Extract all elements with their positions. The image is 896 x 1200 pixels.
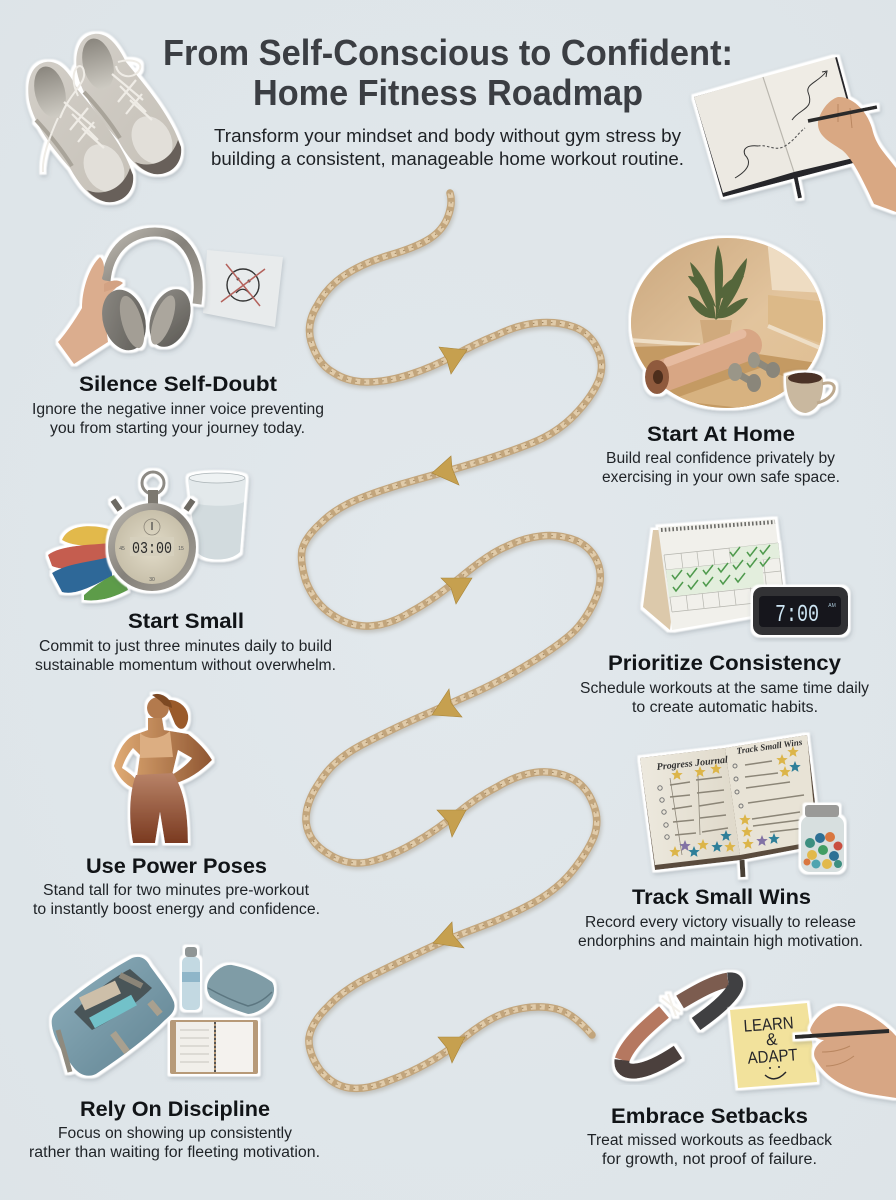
text block: Commit to just three minutes daily to build [39, 638, 332, 655]
icon: resistance bands [48, 526, 128, 600]
text block: to instantly boost energy and confidence. [33, 901, 320, 918]
heading: Embrace Setbacks [611, 1104, 808, 1128]
heading: Track Small Wins [632, 885, 811, 909]
heading: Rely On Discipline [80, 1097, 270, 1121]
icon: progress journal: Track Small Wins [736, 737, 803, 756]
title: Home Fitness Roadmap [253, 72, 643, 113]
text block: you from starting your journey today. [50, 420, 305, 437]
text block [602, 450, 840, 486]
text block: for growth, not proof of failure. [602, 1151, 817, 1168]
icon: stopwatch: 15 [178, 546, 184, 552]
text block: endorphins and maintain high motivation. [578, 933, 863, 950]
title: From Self-Conscious to Confident: [163, 32, 733, 73]
icon: jar of marbles [801, 805, 844, 872]
panel: Track Small Wins [578, 735, 863, 950]
icon: crossed-out frowning face note [203, 250, 284, 329]
icon: alarm clock: AM [828, 603, 836, 609]
icon: alarm clock [753, 587, 848, 635]
arrow 1 [439, 347, 467, 374]
icon: broken strap [622, 980, 736, 1071]
arrow 5 [437, 810, 466, 837]
text block [35, 638, 336, 674]
icon: sneakers [28, 34, 181, 202]
text block: Treat missed workouts as feedback [587, 1132, 832, 1149]
panel: Start Small [35, 472, 336, 674]
icon: home room scene [625, 235, 830, 420]
icon: gym bag [52, 957, 175, 1076]
icon: woman in power pose [114, 694, 212, 843]
arrow 7 [438, 1037, 465, 1063]
text block: rather than waiting for fleeting motivation. [29, 1144, 320, 1161]
icon: alarm clock: 7:00 [775, 602, 819, 629]
panel: Rely On Discipline [29, 947, 320, 1161]
icon: headphones and hand [58, 232, 198, 364]
icon: coffee cup [786, 372, 834, 413]
icon: stopwatch: 45 [119, 546, 125, 552]
icon: hand writing with pen [795, 1006, 896, 1098]
icon: open planner [170, 1020, 258, 1074]
text block [32, 401, 324, 437]
text block: Record every victory visually to release [585, 914, 856, 931]
subtitle: building a consistent, manageable home workout routine. [211, 148, 684, 169]
heading: Start Small [128, 609, 244, 633]
text block: Stand tall for two minutes pre-workout [43, 882, 310, 899]
text block [33, 882, 320, 918]
heading: Start At Home [647, 422, 795, 446]
panel: Prioritize Consistency [580, 519, 869, 716]
icon: water bottle [182, 947, 200, 1010]
icon: desk calendar [643, 519, 786, 630]
icon: progress journal [640, 735, 820, 877]
title [163, 32, 733, 113]
text block: to create automatic habits. [632, 699, 818, 716]
subtitle [211, 125, 684, 169]
icon: folded towel [207, 965, 274, 1014]
text block: sustainable momentum without overwhelm. [35, 657, 336, 674]
text block [580, 680, 869, 716]
text block [587, 1132, 832, 1168]
rope [302, 193, 603, 1091]
panel: Start At Home [602, 235, 840, 486]
heading: Silence Self-Doubt [79, 372, 277, 396]
arrow 2 [432, 456, 459, 485]
text block: Ignore the negative inner voice preventing [32, 401, 324, 418]
icon: water glass [188, 473, 246, 560]
text block: exercising in your own safe space. [602, 469, 840, 486]
heading: Prioritize Consistency [608, 651, 841, 675]
icon: sticky note Learn and Adapt: ADAPT [747, 1045, 798, 1068]
text block: Build real confidence privately by [606, 450, 835, 467]
text block: Schedule workouts at the same time daily [580, 680, 869, 697]
panel: Embrace Setbacks [587, 980, 896, 1168]
text block [578, 914, 863, 950]
subtitle: Transform your mindset and body without gym stress by [214, 125, 682, 146]
arrow 6 [433, 922, 464, 948]
arrow 3 [441, 578, 472, 604]
roadmap rope with arrows [302, 193, 603, 1091]
heading: Use Power Poses [86, 854, 267, 878]
icon: stopwatch: 03:00 [132, 540, 172, 559]
text block: Focus on showing up consistently [58, 1125, 292, 1142]
icon: stopwatch: 30 [149, 577, 155, 583]
icon: progress journal: Progress Journal [656, 755, 729, 773]
icon: sticky note Learn and Adapt: LEARN [743, 1013, 794, 1036]
icon: stopwatch [108, 472, 196, 591]
icon: sticky note Learn and Adapt: & [765, 1030, 779, 1049]
panel: Silence Self-Doubt [32, 232, 324, 437]
icon: notebook and hand [694, 57, 896, 212]
arrow 4 [432, 689, 462, 717]
panel: Use Power Poses [33, 694, 320, 918]
icon: sticky note Learn and Adapt [730, 1003, 817, 1088]
text block [29, 1125, 320, 1161]
